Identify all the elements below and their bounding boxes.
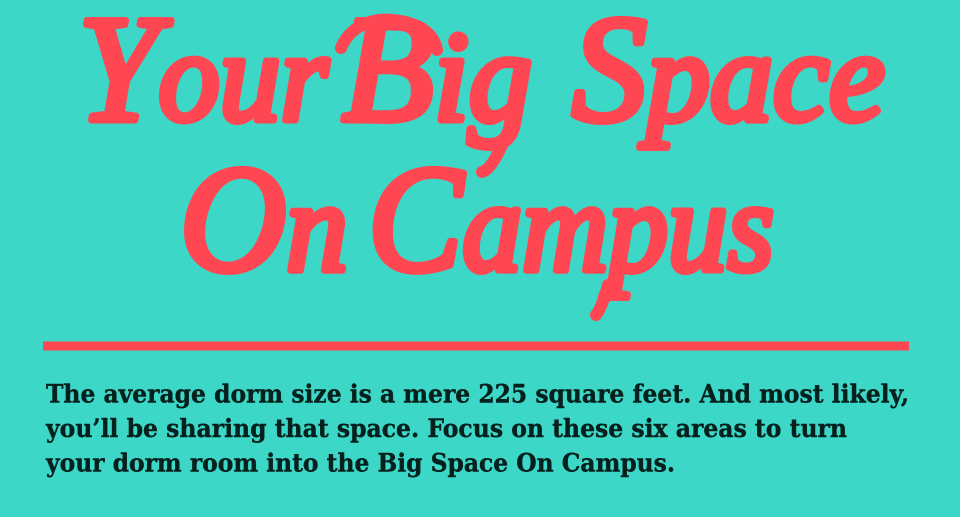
title line 1: [78, 0, 885, 153]
intro text block: [45, 380, 909, 478]
intro text block: you’ll be sharing that space. Focus on these six areas to turn: [45, 414, 847, 443]
title: [78, 0, 885, 315]
divider rule: [43, 342, 909, 350]
intro text block: your dorm room into the Big Space On Campus.: [45, 448, 675, 478]
title line 2: [180, 135, 774, 303]
intro text block: The average dorm size is a mere 225 square feet. And most likely,: [46, 380, 909, 408]
title line 2: Campus: [368, 135, 774, 303]
title line 2: On: [180, 135, 348, 303]
